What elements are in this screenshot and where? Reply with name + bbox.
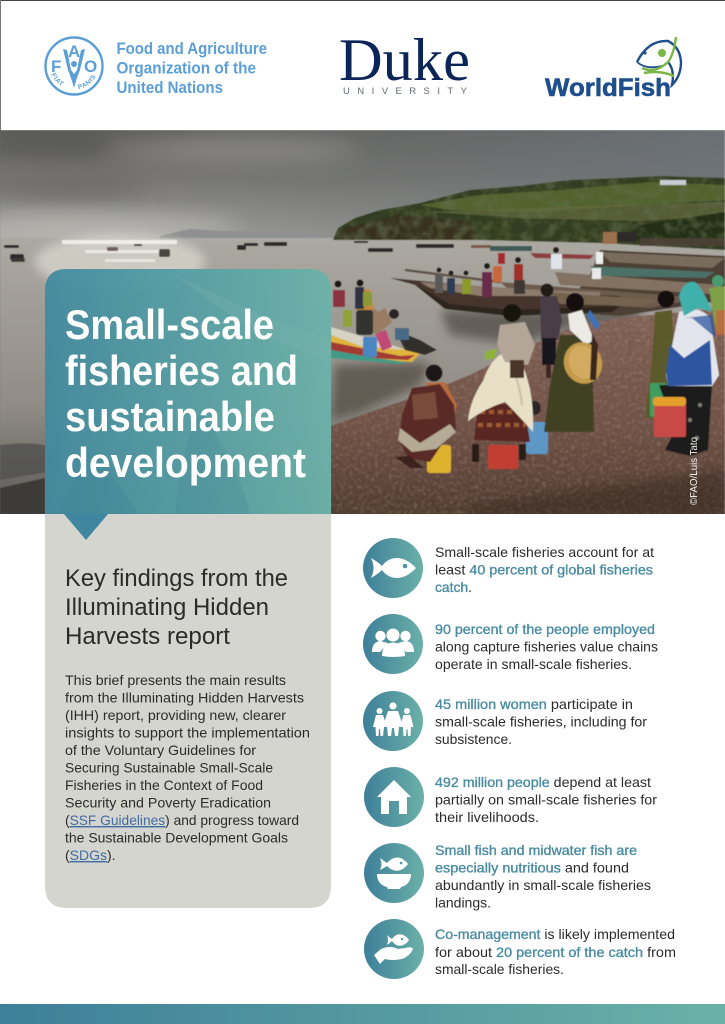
text block: brief description: the Sustainable Development Goals — [65, 830, 288, 846]
finding: 90 percent employed — [363, 614, 658, 674]
finding text: subsistence. — [435, 731, 512, 747]
woman in olive dress with green bucket — [645, 290, 675, 418]
footer bar — [0, 1004, 725, 1024]
figure at right edge — [709, 275, 725, 335]
finding text: Small-scale fisheries account for at — [435, 544, 654, 560]
text block: brief description: Fisheries in the Context of Food — [65, 777, 263, 793]
text block: brief description: Securing Sustainable Small-Scale — [65, 760, 273, 776]
logo: Duke University: UNIVERSITY — [343, 86, 468, 97]
woman in green dress with basin — [544, 293, 608, 432]
panel: key findings — [45, 514, 331, 908]
finding text: small-scale fisheries, including for — [435, 714, 647, 730]
hillside — [333, 176, 725, 251]
logo: WorldFish — [545, 37, 681, 102]
header logos — [44, 27, 682, 102]
text block: brief description — [65, 672, 310, 863]
finding text: least 40 percent of global fisheries — [435, 562, 653, 578]
finding text — [435, 774, 657, 825]
text block: brief description: of the Voluntary Guidelines for — [65, 742, 256, 758]
title text: development — [65, 439, 306, 486]
finding text: 90 percent of the people employed — [435, 621, 655, 637]
finding text — [435, 621, 658, 672]
woman in floral blouse — [485, 304, 535, 378]
text block: brief description: This brief presents the main results — [65, 672, 286, 688]
text block: brief description: insights to support the implementation — [65, 724, 310, 740]
finding text: 45 million women participate in — [435, 696, 633, 712]
woman in blue and white jacket with red bucket — [653, 282, 719, 456]
finding text: especially nutritious and found — [435, 860, 629, 876]
finding text: landings. — [435, 894, 491, 910]
woman in cream cloth with red bucket — [468, 353, 548, 469]
heading: key findings: Illuminating Hidden — [65, 594, 269, 621]
icon: fish — [363, 538, 423, 598]
beach — [331, 305, 725, 515]
finding text: abundantly in small-scale fisheries — [435, 877, 651, 893]
logo: FAO: United Nations — [116, 79, 223, 97]
finding: nutritious small fish — [364, 842, 651, 910]
finding: co-management — [364, 919, 676, 979]
icon: women — [363, 691, 423, 751]
text block: brief description: from the Illuminating Hidden Harvests — [65, 690, 304, 706]
heading: key findings: Harvests report — [65, 623, 230, 650]
logo: FAO: O — [84, 57, 97, 76]
boat with yellow and red hull — [331, 280, 437, 364]
finding text: 492 million people depend at least — [435, 774, 651, 790]
icon: people — [363, 614, 423, 674]
text block: brief description: Security and Poverty Eradication — [65, 794, 271, 810]
moored boats — [390, 250, 725, 316]
standing man — [540, 284, 562, 378]
finding text — [435, 696, 647, 747]
icon: house — [364, 767, 424, 827]
finding text: operate in small-scale fisheries. — [435, 656, 632, 672]
title text — [65, 301, 306, 486]
title text: sustainable — [65, 393, 275, 440]
title text: fisheries and — [65, 347, 298, 394]
photo credit: ©FAO/Luis Tato — [689, 437, 700, 505]
finding: 492 million people — [364, 767, 657, 827]
people on the long boat — [435, 247, 603, 297]
finding text: for about 20 percent of the catch from — [435, 944, 676, 960]
finding text: Co-management is likely implemented — [435, 926, 675, 942]
finding text: partially on small-scale fisheries for — [435, 792, 657, 808]
sky — [0, 130, 725, 242]
logo: WorldFish: WorldFish — [545, 74, 671, 102]
finding text: along capture fisheries value chains — [435, 638, 658, 654]
finding text — [435, 842, 651, 910]
icon: fish over bowl — [364, 843, 424, 903]
logo: FAO: F — [51, 57, 61, 76]
heading: key findings — [65, 565, 288, 650]
text block: brief description: (IHH) report, providing new, clearer — [65, 707, 286, 723]
finding: 45 million women — [363, 691, 647, 751]
logo: FAO: A — [68, 42, 80, 61]
icon: hand holding fish — [364, 919, 424, 979]
logo: FAO: FIAT — [52, 72, 64, 86]
finding text: Small fish and midwater fish are — [435, 842, 637, 858]
finding text — [435, 544, 654, 595]
heading: key findings: Key findings from the — [65, 565, 288, 592]
logo: FAO: Food and Agriculture — [116, 40, 267, 58]
logo: FAO — [44, 36, 267, 97]
logo: FAO: Organization of the — [116, 60, 256, 78]
finding text: catch. — [435, 579, 472, 595]
water — [0, 234, 725, 515]
woman seated on yellow bucket — [395, 364, 457, 473]
finding text: their livelihoods. — [435, 809, 539, 825]
text block: brief description: (SSF Guidelines) and progress toward — [65, 812, 299, 828]
panel: title — [45, 269, 331, 514]
logo: FAO: PANIS — [78, 75, 95, 90]
text block: brief description: (SDGs). — [65, 847, 116, 863]
finding: 40 percent of catch — [363, 538, 654, 598]
title text: Small-scale — [65, 301, 274, 348]
logo: Duke University: Duke — [339, 27, 470, 93]
photo: lakeshore with boats and women — [0, 130, 725, 515]
distant boats — [4, 241, 532, 262]
finding text: small-scale fisheries. — [435, 961, 564, 977]
finding text — [435, 926, 676, 977]
arrow: panel pointer — [64, 514, 108, 540]
